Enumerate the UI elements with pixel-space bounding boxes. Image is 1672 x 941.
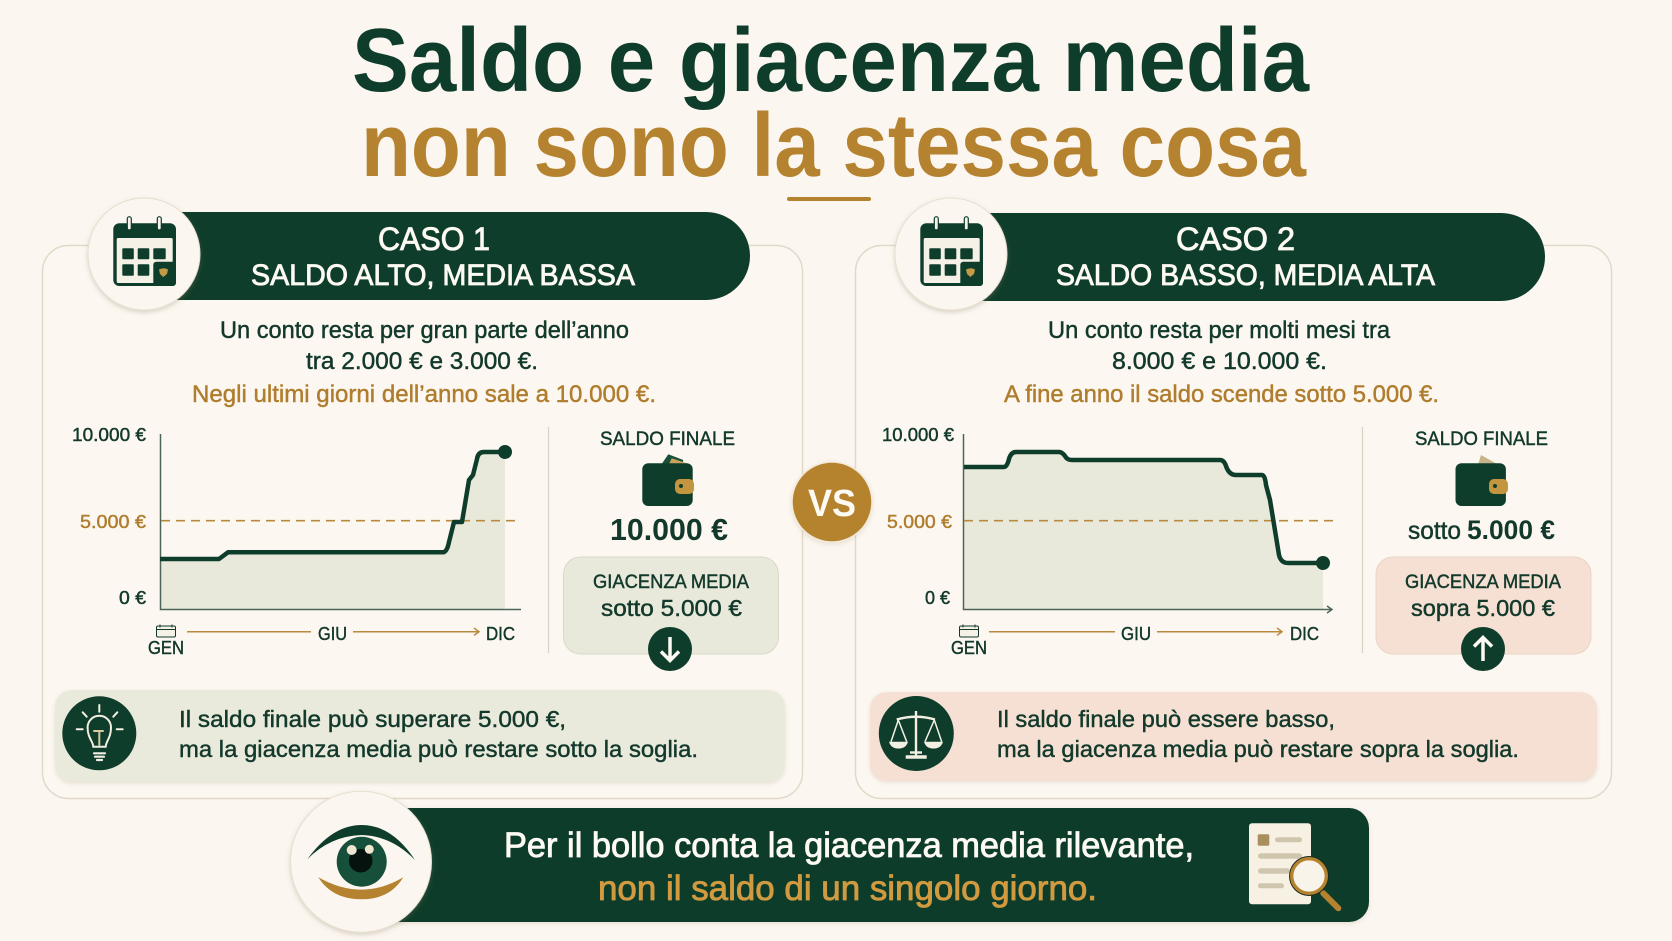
chart: saldo caso 2 xyxy=(882,424,1334,658)
text block: descrizione caso 1: Un conto resta per gran parte dell’anno xyxy=(220,317,629,344)
panel: caso 1 xyxy=(42,198,802,798)
saldo finale caso 1: SALDO FINALE xyxy=(600,428,735,450)
chart: saldo caso 2: GEN xyxy=(951,637,987,658)
header: caso 2 xyxy=(895,198,1545,310)
giacenza media caso 1: sotto 5.000 € xyxy=(601,595,742,621)
note: caso 1: ma la giacenza media può restare sotto la soglia. xyxy=(179,736,698,762)
note: caso 1: Il saldo finale può superare 5.000 €, xyxy=(179,706,566,732)
text block: descrizione caso 2: 8.000 € e 10.000 €. xyxy=(1112,348,1327,375)
chart: saldo caso 1 xyxy=(72,424,521,658)
icon: wallet xyxy=(642,454,694,506)
chart: saldo caso 1: GIU xyxy=(318,623,347,644)
text block: descrizione caso 1: tra 2.000 € e 3.000 €. xyxy=(306,348,538,375)
header: caso 1: SALDO ALTO, MEDIA BASSA xyxy=(251,259,635,292)
saldo finale caso 2: sotto xyxy=(1408,517,1461,545)
title: Saldo e giacenza media xyxy=(352,11,1310,111)
giacenza media caso 1: GIACENZA MEDIA xyxy=(593,571,749,593)
chart: saldo caso 2: 5.000 € xyxy=(887,511,953,532)
chart: saldo caso 2: DIC xyxy=(1290,623,1319,644)
chart: saldo caso 2: GIU xyxy=(1121,623,1151,644)
chart: saldo caso 2: 10.000 € xyxy=(882,424,955,445)
banner: conclusione: non il saldo di un singolo giorno. xyxy=(598,869,1097,908)
header: caso 1 xyxy=(88,198,750,310)
icon: arrow down xyxy=(648,627,692,671)
icon: scales xyxy=(879,696,954,771)
icon: document with magnifier xyxy=(1249,823,1338,908)
saldo finale caso 1: 10.000 € xyxy=(610,512,728,547)
banner: conclusione xyxy=(290,791,1369,932)
header: caso 2: CASO 2 xyxy=(1176,221,1295,257)
text block: descrizione caso 1 xyxy=(192,317,656,408)
note: caso 2: Il saldo finale può essere basso, xyxy=(997,706,1335,732)
header: caso 2: SALDO BASSO, MEDIA ALTA xyxy=(1056,259,1435,292)
icon: small calendar xyxy=(960,624,978,637)
icon: small calendar xyxy=(156,624,176,637)
note: caso 2 xyxy=(870,692,1597,781)
note: caso 2: ma la giacenza media può restare sopra la soglia. xyxy=(997,736,1519,762)
icon: calendar xyxy=(920,217,983,286)
badge: VS xyxy=(792,462,872,542)
giacenza media caso 2 xyxy=(1376,557,1591,671)
icon: calendar xyxy=(113,217,176,286)
saldo finale caso 2: SALDO FINALE xyxy=(1415,428,1548,450)
note: caso 1 xyxy=(55,690,785,782)
icon: wallet xyxy=(1456,455,1508,506)
giacenza media caso 2: sopra 5.000 € xyxy=(1411,595,1555,621)
chart: saldo caso 1: GEN xyxy=(148,637,184,658)
text block: descrizione caso 2: Un conto resta per molti mesi tra xyxy=(1048,317,1391,344)
saldo finale caso 2: 5.000 € xyxy=(1467,515,1555,545)
icon: light bulb xyxy=(62,696,136,770)
chart: saldo caso 2: 0 € xyxy=(925,587,951,608)
text block: descrizione caso 1: Negli ultimi giorni dell’anno sale a 10.000 €. xyxy=(192,381,656,408)
header: caso 1: CASO 1 xyxy=(378,221,490,257)
chart: saldo caso 1: 5.000 € xyxy=(80,511,147,532)
title xyxy=(352,11,1310,201)
chart: saldo caso 1: DIC xyxy=(486,623,515,644)
saldo finale caso 1 xyxy=(600,428,735,547)
chart: saldo caso 1: 0 € xyxy=(119,587,147,608)
panel: caso 2 xyxy=(856,198,1612,798)
saldo finale caso 2 xyxy=(1408,428,1555,545)
text block: descrizione caso 2 xyxy=(1004,317,1439,408)
icon: eye xyxy=(307,825,415,899)
chart: saldo caso 1: 10.000 € xyxy=(72,424,147,445)
banner: conclusione: Per il bollo conta la giacenza media rilevante, xyxy=(504,826,1194,865)
giacenza media caso 1 xyxy=(564,557,778,671)
giacenza media caso 2: GIACENZA MEDIA xyxy=(1405,571,1561,593)
text block: descrizione caso 2: A fine anno il saldo scende sotto 5.000 €. xyxy=(1004,381,1439,408)
title: non sono la stessa cosa xyxy=(361,96,1307,196)
icon: arrow up xyxy=(1461,627,1505,671)
badge: VS: VS xyxy=(808,483,856,525)
